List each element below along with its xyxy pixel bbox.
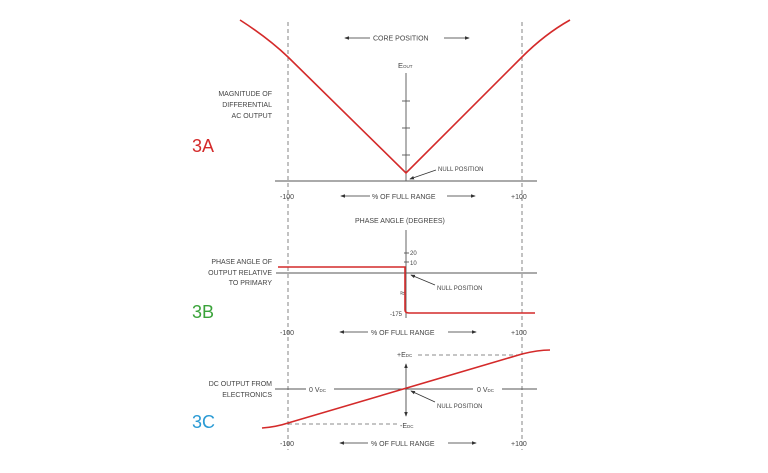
panel: 3B: OUTPUT RELATIVE xyxy=(208,270,272,277)
callout: null position xyxy=(411,275,482,292)
label: 3A: 3A xyxy=(192,136,214,156)
axis labels: +100 xyxy=(511,194,527,201)
callout: null position: NULL POSITION xyxy=(437,286,482,292)
panel: 3B: -175 xyxy=(390,312,403,318)
panel: 3C: -100 xyxy=(280,441,294,448)
dashed range lines xyxy=(288,22,522,450)
panel: 3C: 0 VDC xyxy=(477,387,495,394)
panel: 3A: AC OUTPUT xyxy=(232,113,273,120)
curve: differential AC output xyxy=(240,20,570,173)
panel: 3B: PHASE ANGLE OF xyxy=(211,259,272,266)
curve: DC output xyxy=(262,350,550,428)
panel: 3B xyxy=(192,218,537,337)
label: 3C: 3C xyxy=(192,412,215,432)
callout: null position: NULL POSITION xyxy=(437,404,482,410)
callout: null position xyxy=(410,167,483,179)
panel: 3C: +EDC xyxy=(397,352,413,359)
panel: 3B: ≈ xyxy=(400,288,405,298)
axis labels xyxy=(280,194,527,201)
panel: 3B: PHASE ANGLE (DEGREES) xyxy=(355,218,445,225)
axes xyxy=(275,73,537,181)
panel: 3A: DIFFERENTIAL xyxy=(222,102,272,109)
label: Eout: EOUT xyxy=(398,61,413,70)
panel: 3C: % OF FULL RANGE xyxy=(371,441,435,448)
panel: 3B: TO PRIMARY xyxy=(229,280,272,287)
panel: 3A xyxy=(192,20,570,201)
heading: core position xyxy=(345,36,469,42)
panel: 3B: 20 xyxy=(410,251,417,257)
panel: 3B: % OF FULL RANGE xyxy=(371,330,435,337)
axis labels: -100 xyxy=(280,194,294,201)
panel: 3C: 0 VDC xyxy=(309,387,327,394)
arrow: vertical axis xyxy=(405,364,407,416)
panel: 3C: ELECTRONICS xyxy=(222,392,272,399)
heading: core position: CORE POSITION xyxy=(373,36,429,42)
panel: 3B: 10 xyxy=(410,261,417,267)
panel: 3C: -EDC xyxy=(400,423,414,430)
y label: MAGNITUDE OF xyxy=(218,91,272,98)
panel: 3C: +100 xyxy=(511,441,527,448)
panel: 3C: DC OUTPUT FROM xyxy=(209,381,272,388)
panel: 3B: +100 xyxy=(511,330,527,337)
panel: 3C xyxy=(192,350,550,448)
callout: null position: NULL POSITION xyxy=(438,167,483,173)
panel: 3B: -100 xyxy=(280,330,294,337)
curve: phase angle xyxy=(278,267,535,313)
axis labels: % OF FULL RANGE xyxy=(372,194,436,201)
label: 3B: 3B xyxy=(192,302,214,322)
callout: null position xyxy=(411,391,482,410)
